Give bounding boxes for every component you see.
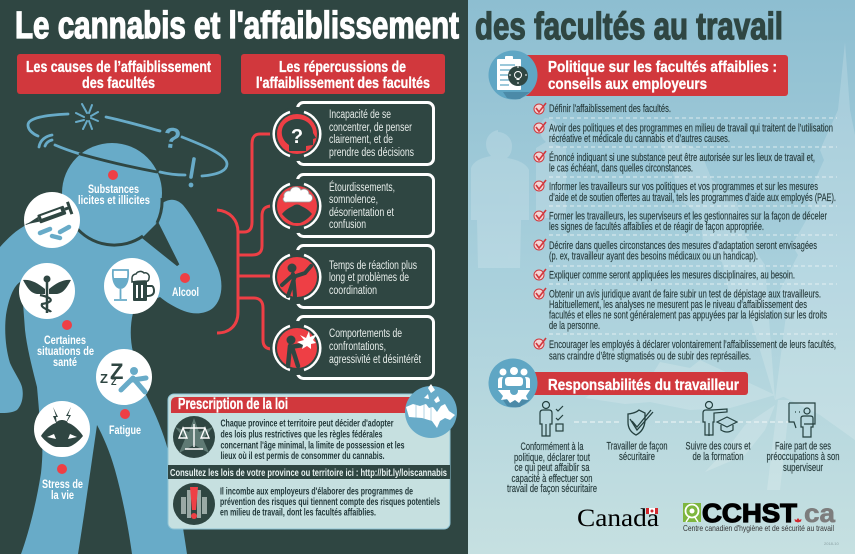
label: health conditions: Certaines (44, 333, 86, 347)
item: accommodation: (p. ex, travailleur ayant des besoins médicaux ou un handicap). (549, 250, 758, 262)
label: health conditions: situations de (37, 344, 94, 358)
cause: substances label: Substances (88, 182, 139, 196)
text: employer duties: Il incombe aux employeurs d'élaborer des programmes de (220, 486, 413, 498)
card: concentration (270, 102, 434, 164)
panel: left dark background (0, 0, 468, 554)
checklist: employer advice (534, 103, 836, 362)
responsibility: declare: Conformément à la (520, 441, 584, 453)
text: provinces may restrict: concernant l'âge minimal, la limite de possession et les (220, 440, 405, 452)
responsibility: training: Suivre des cours et (686, 440, 750, 452)
heading: repercussions (241, 54, 445, 94)
icon: scales of justice (173, 416, 215, 458)
dashed separators (549, 118, 837, 334)
logo: CCHST: ca (804, 498, 836, 528)
card: reaction time (270, 246, 434, 308)
responsibility: declare: politique, déclarer tout (514, 452, 590, 464)
responsibility: work safely (606, 410, 668, 463)
card: concentration: Incapacité de se (329, 109, 391, 121)
connector: red bracket linking causes to effects (217, 134, 276, 349)
responsibility: declare: capacité à effectuer son (512, 473, 592, 485)
responsibility: declare: ce qui peut affaiblir sa (514, 462, 590, 474)
text: provinces may restrict: Chaque province et territoire peut décider d'adopter (220, 418, 394, 430)
responsibility: training (686, 402, 750, 463)
text: provinces may restrict: des lois plus restrictives que les règles fédérales (220, 430, 383, 440)
item: policies (534, 122, 833, 145)
heading: causes: des facultés (82, 75, 155, 92)
item: define (534, 103, 671, 115)
responsibility: training: de la formation (692, 451, 744, 463)
card: concentration: concentrer, de penser (329, 122, 412, 134)
watermark: cannabis leaf and workers (471, 42, 855, 490)
heading: causes: Les causes de l’affaiblissement (26, 59, 211, 76)
panel: right light background (468, 0, 855, 554)
cause: substances label: licites et illicites (78, 193, 150, 207)
logo: CCHST (683, 498, 836, 533)
header: prescription (171, 396, 420, 413)
card: dizziness: désorientation et (329, 207, 395, 219)
heading: worker responsibilities (520, 372, 748, 395)
text: employer duties: en milieu de travail, dont les facultés affaiblies. (220, 508, 376, 518)
label: life stress (42, 464, 83, 502)
header: prescription: Prescription de la loi (178, 396, 288, 413)
card: behaviour: agressivité et désintérêt (329, 354, 422, 366)
label: life stress: Stress de (42, 477, 83, 491)
heading: causes (17, 54, 221, 94)
card: behaviour: confrontations, (329, 341, 386, 353)
card: concentration: prendre des décisions (329, 147, 414, 159)
icon: fatigue: Z (100, 371, 108, 386)
heading: policy advice: Politique sur les facultés affaiblies : (548, 59, 777, 76)
card: concentration: ? (291, 126, 303, 148)
item: legal opinion (534, 288, 827, 332)
label: life stress: la vie (51, 488, 74, 502)
icon: caduceus (19, 263, 75, 319)
card: behaviour: Comportements de (329, 328, 402, 340)
logo: Canada wordmark: Canada (577, 505, 659, 532)
icon: fatigue (96, 349, 152, 405)
panel: law prescription (168, 394, 450, 529)
label: fatigue (109, 409, 141, 437)
heading: repercussions: l'affaiblissement des facultés (256, 75, 430, 92)
ring of confusion around head (28, 104, 227, 187)
card: reaction time: coordination (329, 285, 377, 297)
card: behaviour (270, 316, 434, 378)
item: legal opinion: de la personne. (549, 320, 600, 332)
heading: policy advice: conseils aux employeurs (548, 76, 707, 93)
icon: warning with workers (173, 483, 215, 525)
card: reaction time: Temps de réaction plus (329, 260, 417, 272)
responsibility: raise concerns: superviseur (783, 462, 823, 474)
item: inform (534, 180, 836, 204)
responsibility: work safely: Travailler de façon (606, 440, 668, 452)
icon: syringe and pills (23, 192, 80, 248)
responsibility: declare (507, 402, 597, 495)
item: statement: le cas échéant, dans quelles circonstances. (549, 162, 693, 174)
item: train: les signes de facultés affaiblies et de réagir de façon appropriée. (549, 221, 764, 233)
text: provinces may restrict: lieux où il est permis de consommer du cannabis. (220, 451, 385, 462)
card: dizziness: confusion (329, 219, 366, 231)
label: health conditions (37, 320, 94, 369)
text: employer duties (220, 486, 440, 518)
label: health conditions: santé (53, 355, 77, 369)
text: provinces may restrict (220, 418, 405, 462)
heading: worker responsibilities: Responsabilités du travailleur (548, 377, 739, 394)
logo: CCHST: CCHST (702, 498, 797, 528)
icon: fatigue: Z (110, 359, 123, 384)
heading: repercussions: Les répercussions de (279, 59, 406, 76)
icon: shield check (628, 410, 653, 435)
item: policies: récréative et médicale du cannabis et d’autres causes. (549, 133, 730, 145)
card: concentration: clairement, et de (329, 134, 393, 146)
label: alcohol (172, 273, 199, 299)
card: reaction time: long et problèmes de (329, 272, 409, 284)
item: train (534, 210, 827, 233)
card: dizziness: somnolence, (329, 194, 378, 206)
heading: policy advice (520, 55, 788, 96)
strip: link to provincial laws (168, 465, 450, 479)
responsibility: raise concerns (766, 403, 840, 474)
icon: worker with speech bubble (789, 403, 815, 437)
icon: stress (34, 401, 90, 457)
icon: team and gear (488, 358, 538, 408)
item: encourage (534, 338, 836, 362)
strip: link to provincial laws: Consultez les lois de votre province ou territoire ici : http://bit.ly/loiscannabis (170, 467, 447, 479)
icon: clipboard with lightbulb (488, 50, 538, 100)
icon: fatigue: Z (111, 377, 117, 387)
text: employer duties: prévention des risques qui tiennent compte des risques potentiels (220, 497, 440, 508)
card: dizziness: Étourdissements, (329, 181, 395, 194)
responsibility: declare: travail de façon sécuritaire (507, 483, 597, 495)
item: accommodation (534, 239, 817, 262)
icon: worker with checklist (540, 402, 563, 436)
label: fatigue: Fatigue (109, 423, 141, 437)
icon: instructor and graduation cap (703, 402, 737, 436)
card: dizziness (270, 174, 434, 236)
cause: substances label (78, 170, 150, 207)
figure: human body silhouette (0, 200, 221, 554)
dashed connector between responsibilities (574, 421, 790, 423)
title: left part: Le cannabis et l'affaiblissement (15, 5, 459, 47)
label: alcohol: Alcool (172, 285, 199, 299)
responsibility: work safely: sécuritaire (619, 451, 655, 463)
item: define: Définir l'affaiblissement des facultés. (549, 103, 671, 115)
item: encourage: sans craindre d’être stigmatisés ou de subir des représailles. (549, 350, 751, 362)
text: document code: 2018-10 (824, 541, 839, 546)
icon: wine and beer (104, 258, 160, 314)
icon: map of Canada (405, 384, 457, 438)
thought bubble: head circle (62, 143, 178, 265)
item: statement (534, 151, 815, 174)
icon: question mark on ring: ? (161, 122, 183, 156)
